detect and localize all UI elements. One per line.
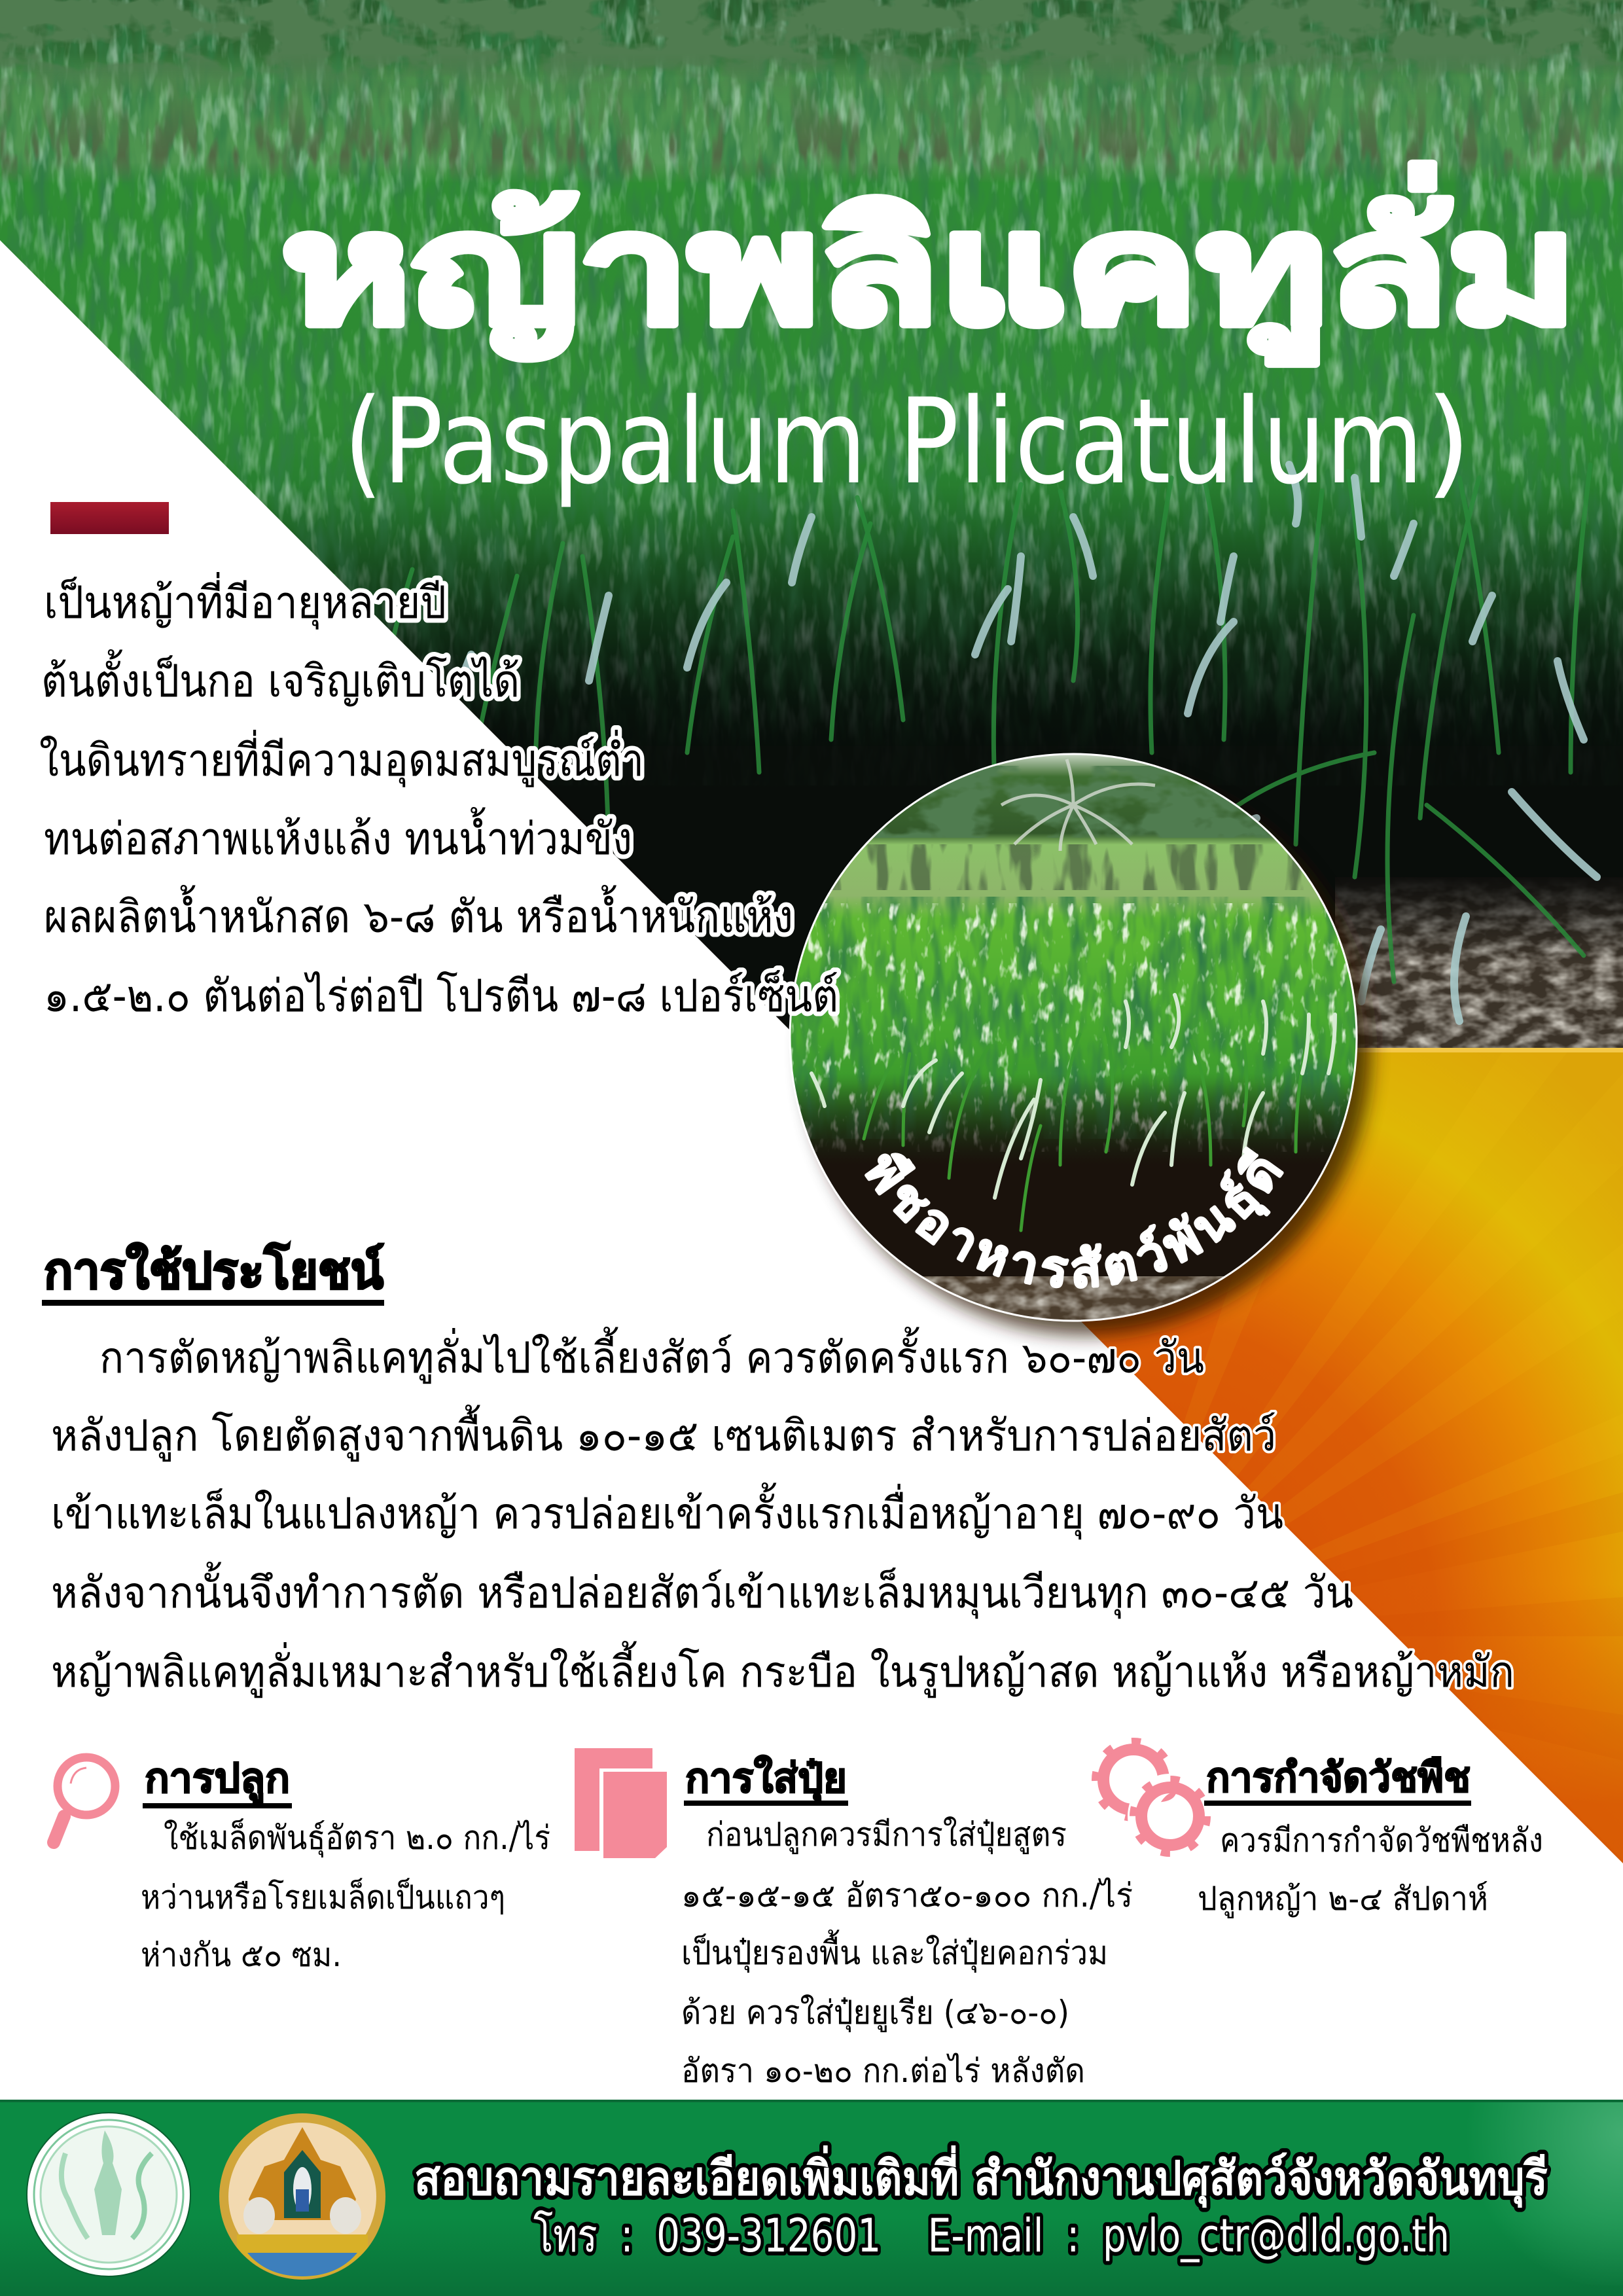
column: fertilizing: เป็นปุ๋ยรองพื้น และใส่ปุ๋ยคอกร่วม <box>681 1929 1108 1973</box>
inset blades <box>812 995 1335 1230</box>
intro text block: ผลผลิตน้ำหนักสด ๖-๘ ตัน หรือน้ำหนักแห้ง <box>44 885 793 943</box>
column: planting: ใช้เมล็ดพันธุ์อัตรา ๒.๐ กก./ไร่ <box>164 1818 550 1857</box>
logo: livestock department seal <box>27 2113 190 2276</box>
intro text block: ๑.๕-๒.๐ ตันต่อไร่ต่อปี โปรตีน ๗-๘ เปอร์เซ็นต์ <box>44 970 838 1022</box>
column: planting: ห่างกัน ๕๐ ซม. <box>141 1936 342 1974</box>
subtitle: scientific name: (Paspalum Plicatulum <box>344 374 1423 511</box>
circular inset photo with curved caption <box>789 753 1357 1322</box>
column: planting <box>141 1754 550 1974</box>
footer band <box>0 2100 1623 2296</box>
background photo: grass field <box>0 0 1623 1048</box>
heading: benefits: การใช้ประโยชน์ <box>44 1242 384 1300</box>
inset palm tree <box>1001 759 1155 851</box>
column: weed control: การกำจัดวัชพืช <box>1206 1753 1471 1801</box>
benefits paragraph: เข้าแทะเล็มในแปลงหญ้า ควรปล่อยเข้าครั้งแรกเมื่อหญ้าอายุ ๗๐-๙๐ วัน <box>51 1482 1283 1540</box>
intro text block <box>39 572 838 1022</box>
benefits paragraph <box>51 1327 1514 1698</box>
dark lower fade <box>0 484 1623 746</box>
intro text block: ทนต่อสภาพแห้งแล้ง ทนน้ำท่วมขัง <box>44 807 632 865</box>
footer contact text: สอบถามรายละเอียดเพิ่มเติมที่ สำนักงานปศุสัตว์จังหวัดจันทบุรี <box>414 2145 1548 2208</box>
footer contact text <box>414 2145 1548 2263</box>
column: fertilizing: การใส่ปุ๋ย <box>685 1754 847 1803</box>
intro text block: ในดินทรายที่มีความอุดมสมบูรณ์ต่ำ <box>39 730 644 787</box>
benefits paragraph: หลังปลูก โดยตัดสูงจากพื้นดิน ๑๐-๑๕ เซนติเมตร สำหรับการปล่อยสัตว์ <box>51 1405 1276 1462</box>
column: fertilizing: ก่อนปลูกควรมีการใส่ปุ๋ยสูตร <box>706 1816 1067 1854</box>
subtitle: scientific name: ) <box>1425 374 1471 511</box>
column: planting: การปลูก <box>145 1754 290 1803</box>
red marker bar <box>50 502 169 534</box>
title: หญ้าพลิแคทูลั่ม <box>281 163 1577 364</box>
light rays <box>1113 1048 1623 1636</box>
column: fertilizing: ๑๕-๑๕-๑๕ อัตรา๕๐-๑๐๐ กก./ไร่ <box>681 1876 1133 1914</box>
benefits paragraph: หญ้าพลิแคทูลั่มเหมาะสำหรับใช้เลี้ยงโค กระบือ ในรูปหญ้าสด หญ้าแห้ง หรือหญ้าหมัก <box>51 1641 1514 1698</box>
benefits paragraph: การตัดหญ้าพลิแคทูลั่มไปใช้เลี้ยงสัตว์ ควรตัดครั้งแรก ๖๐-๗๐ วัน <box>99 1327 1204 1384</box>
column: weed control <box>1198 1753 1543 1918</box>
logo: Chanthaburi province seal <box>219 2113 385 2280</box>
icon: documents <box>575 1748 671 1861</box>
orange ray panel <box>720 1048 1623 1899</box>
icon: magnifier <box>54 1757 115 1842</box>
column: weed control: ปลูกหญ้า ๒-๔ สัปดาห์ <box>1198 1880 1488 1918</box>
column: fertilizing: ด้วย ควรใส่ปุ๋ยยูเรีย (๔๖-๐-๐) <box>681 1994 1069 2032</box>
column: weed control: ควรมีการกำจัดวัชพืชหลัง <box>1220 1821 1543 1859</box>
grass blades <box>223 465 1597 1021</box>
circle shadow <box>804 768 1371 1335</box>
intro text block: ต้นตั้งเป็นกอ เจริญเติบโตได้ <box>41 649 520 708</box>
soil at bottom right <box>1335 877 1623 1048</box>
benefits paragraph: หลังจากนั้นจึงทำการตัด หรือปล่อยสัตว์เข้าแทะเล็มหมุนเวียนทุก ๓๐-๔๕ วัน <box>51 1562 1353 1619</box>
dark stalks in the distant band <box>0 84 1623 181</box>
curved caption: พืชอาหารสัตว์พันธุ์ดี <box>865 1147 1284 1289</box>
icon: gears <box>1096 1742 1211 1857</box>
column: planting: หว่านหรือโรยเมล็ดเป็นแถวๆ <box>141 1878 505 1916</box>
intro text block: เป็นหญ้าที่มีอายุหลายปี <box>44 572 446 630</box>
column: fertilizing: อัตรา ๑๐-๒๐ กก.ต่อไร่ หลังตัด <box>681 2052 1085 2090</box>
dark tree line at the top <box>0 0 1623 98</box>
column: fertilizing <box>681 1754 1133 2090</box>
